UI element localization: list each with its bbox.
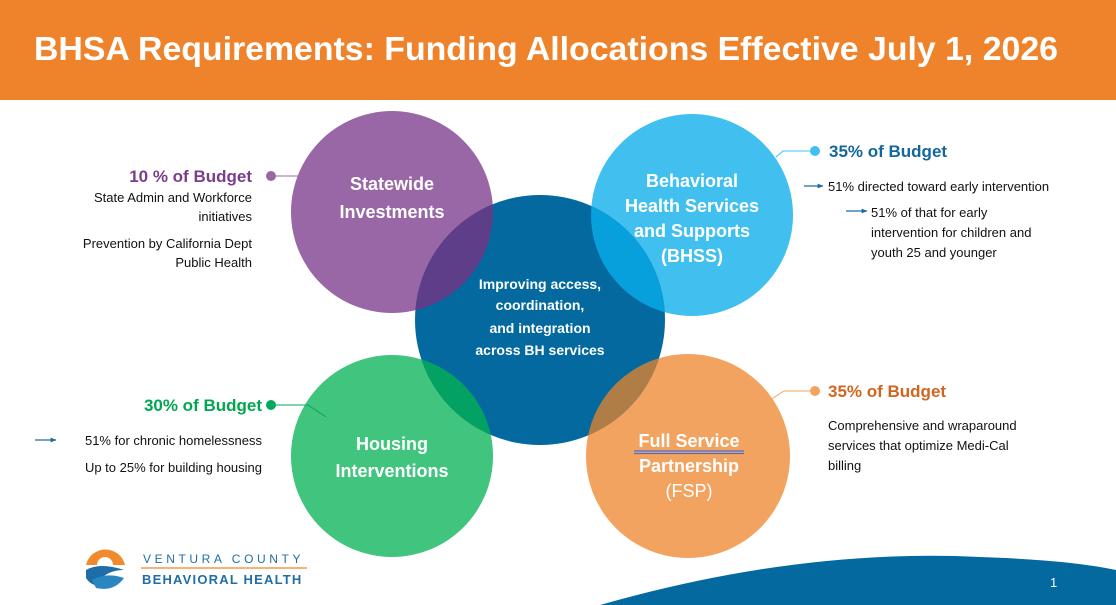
callout: statewide 10%: initiatives <box>199 209 252 224</box>
FSP label: Full Service <box>638 431 740 451</box>
title: BHSA Requirements: Funding Allocations Effective July 1, 2026 <box>34 30 1058 67</box>
callout: statewide 10%: Prevention by California Dept <box>83 236 252 251</box>
FSP label <box>634 431 744 501</box>
BHSS label: and Supports <box>634 221 750 241</box>
header bar <box>0 0 1116 100</box>
callout: statewide 10% <box>83 167 318 270</box>
callout: BHSS 35%: youth 25 and younger <box>871 245 997 260</box>
icon: sun and wave <box>86 549 125 589</box>
callout: FSP 35%: Comprehensive and wraparound <box>828 418 1017 433</box>
callout: housing 30% <box>35 396 326 475</box>
arrow <box>35 439 56 441</box>
page number: 1 <box>1050 575 1057 590</box>
circle: BHSS <box>591 114 793 316</box>
callout: housing 30%: 51% for chronic homelessness <box>85 433 262 448</box>
circle: FSP <box>586 354 790 558</box>
BHSS label <box>625 171 759 266</box>
callout: BHSS 35%: 51% directed toward early intervention <box>828 179 1049 194</box>
BHSS label: Behavioral <box>646 171 738 191</box>
callout: BHSS 35%: intervention for children and <box>871 225 1031 240</box>
callout: BHSS 35%: 51% of that for early <box>871 205 988 220</box>
statewide label: Investments <box>339 202 445 222</box>
center text: coordination, <box>496 297 584 313</box>
statewide label <box>339 174 445 222</box>
callout: FSP 35%: billing <box>828 458 861 473</box>
logo: VENTURA COUNTY <box>143 552 304 566</box>
arrow <box>846 210 867 212</box>
logo <box>86 549 307 589</box>
callout: BHSS 35% <box>776 142 1049 260</box>
callout: FSP 35%: 35% of Budget <box>828 382 946 401</box>
callout: statewide 10%: 10 % of Budget <box>129 167 252 186</box>
center text: and integration <box>489 320 591 336</box>
housing label: Interventions <box>335 461 449 481</box>
callout: FSP 35%: services that optimize Medi-Cal <box>828 438 1009 453</box>
statewide label: Statewide <box>350 174 434 194</box>
BHSS label: Health Services <box>625 196 759 216</box>
callout: housing 30%: 30% of Budget <box>144 396 262 415</box>
FSP label: (FSP) <box>666 481 712 501</box>
center circle <box>415 195 665 445</box>
center text: Improving access, <box>479 276 601 292</box>
logo: BEHAVIORAL HEALTH <box>142 572 303 587</box>
callout: FSP 35% <box>770 382 1017 473</box>
FSP label: Partnership <box>639 456 739 476</box>
callout: statewide 10%: Public Health <box>175 255 252 270</box>
center text <box>475 276 605 358</box>
center text: across BH services <box>475 342 605 358</box>
housing label: Housing <box>356 434 428 454</box>
bottom wave <box>600 556 1116 605</box>
callout: housing 30%: Up to 25% for building housing <box>85 460 262 475</box>
arrow <box>804 185 823 187</box>
callout: statewide 10%: State Admin and Workforce <box>94 190 252 205</box>
BHSS label: (BHSS) <box>661 246 723 266</box>
circle: housing <box>291 355 493 557</box>
housing label <box>335 434 449 481</box>
callout: BHSS 35%: 35% of Budget <box>829 142 947 161</box>
circle: statewide investments <box>291 111 493 313</box>
